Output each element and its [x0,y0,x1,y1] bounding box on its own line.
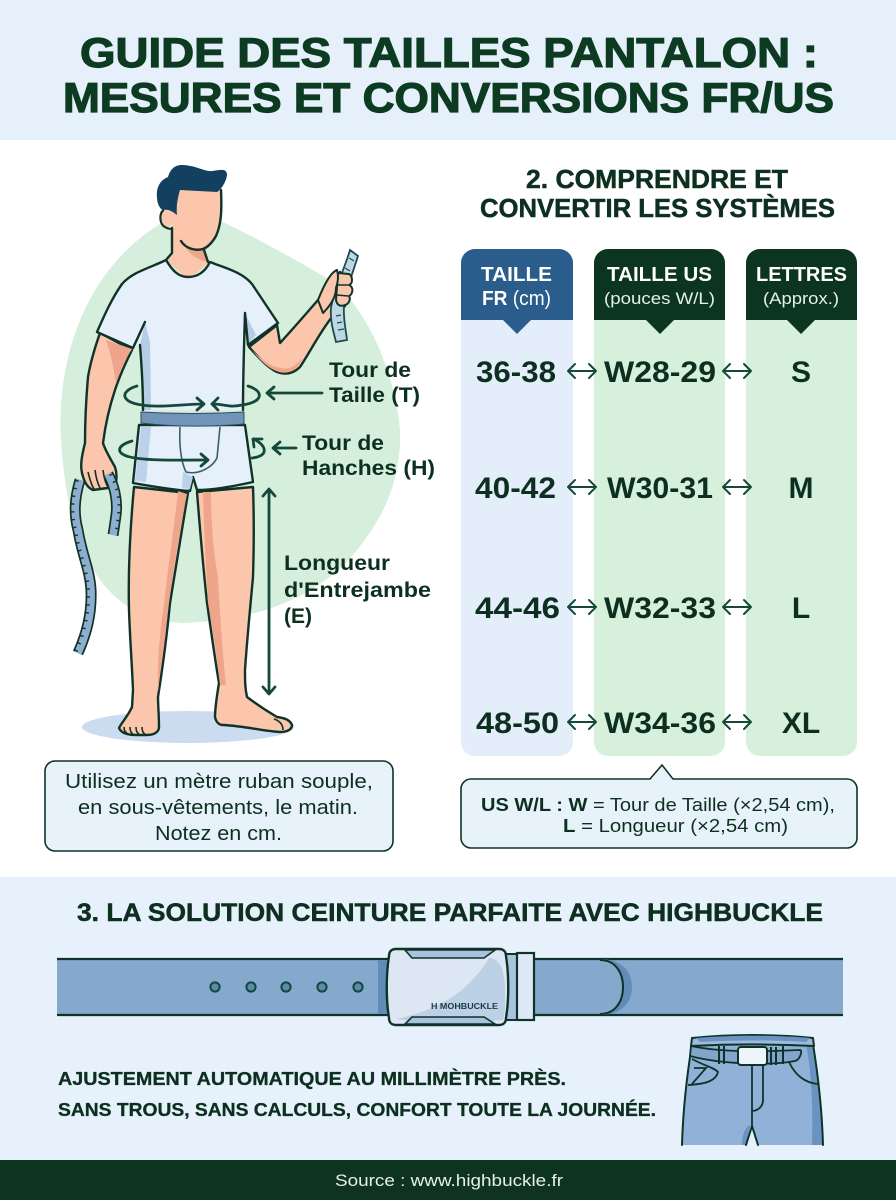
row: 40-42: M [788,472,814,505]
column: taille FR: FR (cm) [482,288,551,310]
underwear [133,425,253,491]
label: longueur d'entrejambe [284,552,431,628]
row: 36-38: S [791,356,811,389]
callout: measuring advice: Utilisez un mètre ruban souple, [65,771,373,793]
row: 48-50 [476,707,820,740]
measuring tape in right hand [331,250,358,342]
panel: belt solution [0,877,896,1160]
column: taille US: TAILLE US [607,264,712,286]
panel: body measurements [45,165,435,851]
row: 40-42: 40-42 [475,472,556,505]
belt strap [57,959,843,1015]
inseam arrow [263,489,275,694]
row: 40-42 [475,472,814,505]
label: longueur d'entrejambe: (E) [284,605,312,628]
t-shirt [97,260,278,410]
row: 36-38: W28-29 [604,356,716,389]
callout: measuring advice: Notez en cm. [155,823,282,845]
row: 40-42: W30-31 [607,472,713,505]
row: 48-50: XL [782,707,820,740]
title band: MESURES ET CONVERSIONS FR/US [63,74,834,121]
title band: GUIDE DES TAILLES PANTALON : [80,29,818,76]
hair [157,165,227,215]
callout: US W/L explanation [461,765,857,848]
callout: US W/L explanation: L = Longueur (×2,54 cm) [563,815,788,836]
belt buckle: H MOHBUCKLE [431,1001,498,1011]
panel: conversion table [461,249,857,756]
heading: section 2: 2. COMPRENDRE ET [526,164,788,194]
column: taille US [594,249,725,756]
label: tour de taille: Taille (T) [329,384,420,407]
row: 44-46: W32-33 [604,592,716,625]
row: 36-38: 36-38 [476,356,556,389]
belt buckle [387,949,534,1025]
row: 44-46 [475,592,810,625]
heading: section 2: CONVERTIR LES SYSTÈMES [480,193,835,223]
row: 44-46: L [792,592,810,625]
benefit text [58,1068,656,1120]
column: taille FR: TAILLE [481,264,552,286]
column: taille FR [461,249,573,756]
waist measurement arrows [125,386,322,410]
row: 48-50: W34-36 [604,707,716,740]
label: tour de hanches: Tour de [302,432,384,455]
label: longueur d'entrejambe: d'Entrejambe [284,579,431,602]
head and neck [166,190,221,280]
footer: Source : www.highbuckle.fr [335,1171,563,1190]
figure [72,165,358,735]
callout: US W/L explanation: US W/L : W = Tour de Taille (×2,54 cm), [481,794,835,815]
heading: section 2 [480,164,835,223]
green background blob [60,216,400,623]
icon: jeans with belt [682,1035,823,1145]
benefit text: AJUSTEMENT AUTOMATIQUE AU MILLIMÈTRE PRÈS. [58,1068,566,1089]
column: taille US: (pouces W/L) [604,289,715,308]
row: 44-46: 44-46 [475,592,560,625]
label: tour de taille: Tour de [329,359,411,382]
footer [0,1160,896,1200]
column: lettres: LETTRES [756,264,847,286]
benefit text: SANS TROUS, SANS CALCULS, CONFORT TOUTE LA JOURNÉE. [58,1099,656,1120]
label: tour de hanches [302,432,435,480]
title band [0,0,896,140]
callout: measuring advice: en sous-vêtements, le matin. [78,797,358,819]
column: lettres: (Approx.) [763,289,839,308]
label: tour de hanches: Hanches (H) [302,457,435,480]
callout: measuring advice [45,761,393,851]
heading: section 3: 3. LA SOLUTION CEINTURE PARFAITE AVEC HIGHBUCKLE [77,899,823,927]
label: longueur d'entrejambe: Longueur [284,552,390,575]
row: 48-50: 48-50 [476,707,559,740]
row: 36-38 [476,356,811,389]
label: tour de taille [329,359,420,407]
hip measurement arrows [120,439,296,466]
column: lettres [746,249,857,756]
fingers of right hand [336,273,352,306]
floor shadow [82,711,294,743]
